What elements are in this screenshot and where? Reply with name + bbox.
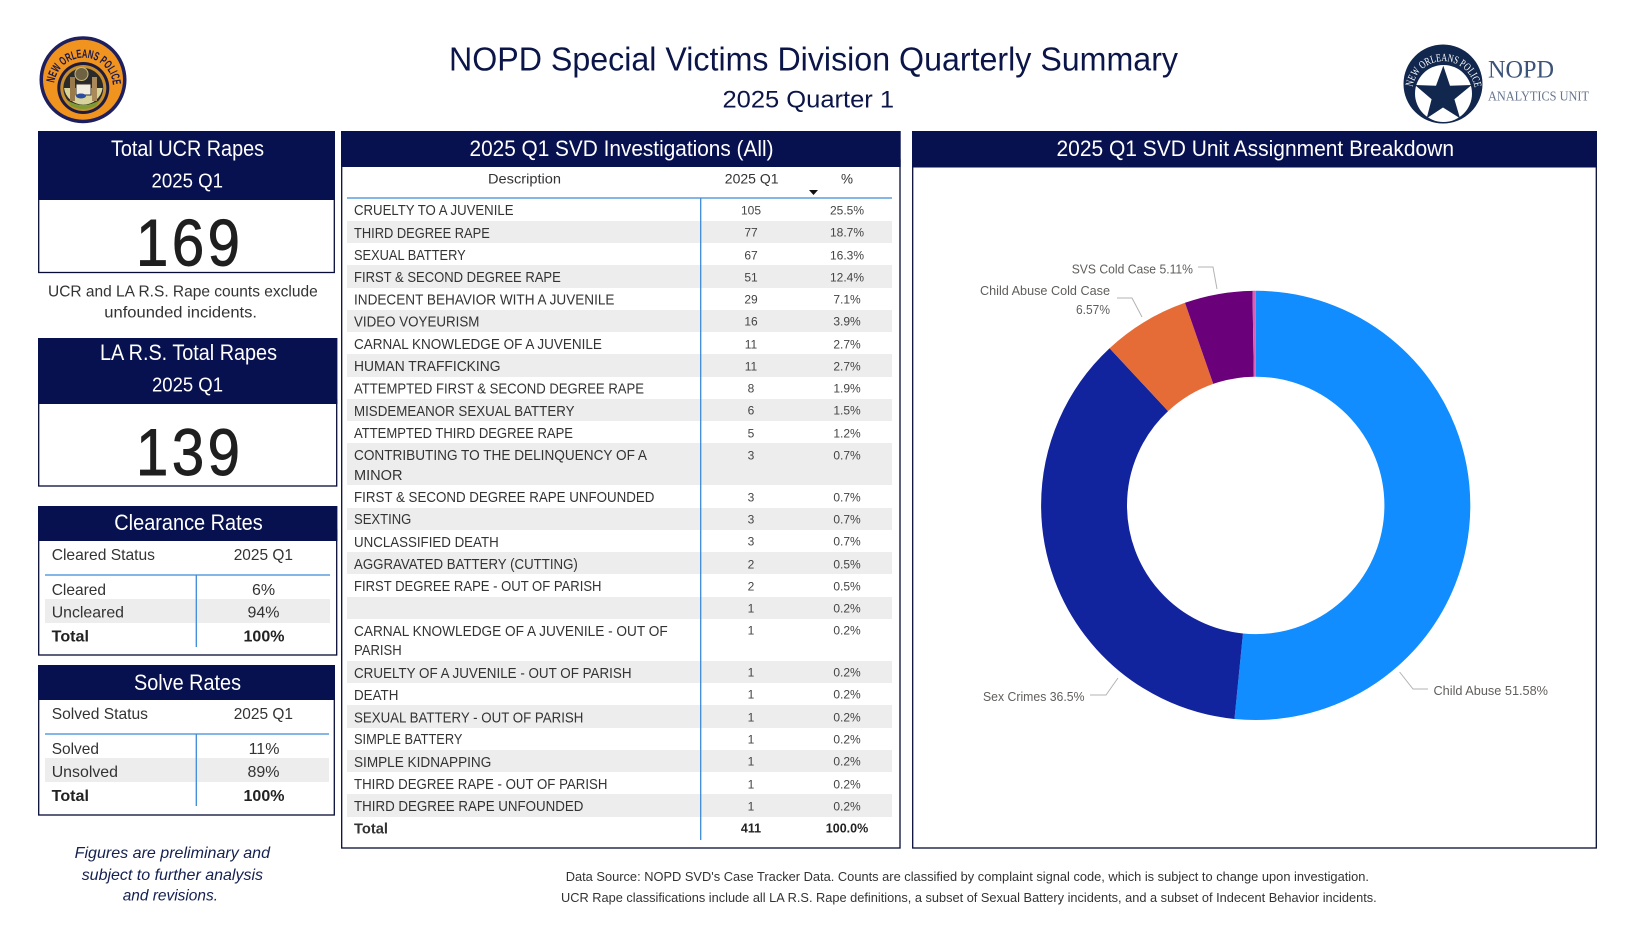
table descriptions: FIRST & SECOND DEGREE RAPE UNFOUNDED [354, 489, 655, 506]
table percentages: 0.7% [833, 448, 861, 462]
table counts: 6 [748, 403, 755, 417]
note: exclusion of unfounded incidents: unfounded incidents. [104, 304, 257, 322]
label: Sex Crimes [983, 678, 1118, 704]
panel: LA R.S. Total Rapes: LA R.S. Total Rapes [100, 340, 277, 365]
table descriptions: AGGRAVATED BATTERY (CUTTING) [354, 556, 578, 573]
table counts: 2 [748, 557, 755, 571]
panel: Clearance Rates: 100% [244, 629, 284, 646]
panel: Solve Rates: Solve Rates [134, 670, 241, 695]
table counts: 3 [748, 534, 755, 548]
panel: Clearance Rates: 6% [252, 582, 275, 599]
table descriptions: SIMPLE BATTERY [354, 731, 462, 748]
panel: Total UCR Rapes: 2025 Q1 [152, 170, 223, 192]
table percentages: 2.7% [833, 337, 861, 351]
heading: unit assignment [912, 131, 1597, 168]
table header: 2025 Q1 [725, 170, 779, 186]
panel: LA R.S. Total Rapes: 139 [136, 417, 243, 490]
panel: Clearance Rates: 94% [247, 605, 280, 622]
table descriptions: PARISH [354, 642, 402, 659]
panel: Solve Rates [38, 665, 335, 815]
note: figures are preliminary [75, 845, 271, 905]
table descriptions: HUMAN TRAFFICKING [354, 358, 500, 375]
table counts: 77 [744, 225, 758, 239]
table descriptions: THIRD DEGREE RAPE - OUT OF PARISH [354, 776, 607, 793]
panel: Clearance Rates: Clearance Rates [114, 510, 263, 535]
icon: NOPD Analytics Unit logo [1404, 44, 1589, 124]
panel: Total UCR Rapes: 169 [136, 207, 243, 281]
icon: New Orleans Police patch logo: NEW ORLEANS POLICE [46, 50, 122, 85]
panel: Solve Rates: Unsolved [52, 764, 118, 781]
table counts: 1 [748, 665, 755, 679]
table counts: 51 [744, 270, 758, 284]
icon: New Orleans Police patch logo [40, 36, 126, 124]
table counts: 3 [748, 490, 755, 504]
note: figures are preliminary: and revisions. [123, 888, 218, 905]
panel: Unit Assignment Breakdown: 2025 Q1 SVD Unit Assignment Breakdown [1056, 136, 1454, 161]
table counts: 1 [748, 687, 755, 701]
table counts: 67 [744, 248, 758, 262]
table descriptions: SEXTING [354, 511, 411, 528]
table percentages: 16.3% [830, 248, 864, 262]
panel: Clearance Rates: 2025 Q1 [234, 547, 293, 564]
note: figures are preliminary: Figures are preliminary and [75, 845, 271, 862]
table percentages [826, 203, 868, 835]
table counts: 11 [745, 359, 758, 373]
icon: NOPD Analytics Unit logo: ANALYTICS UNIT [1488, 90, 1589, 105]
table percentages: 18.7% [830, 225, 864, 239]
table percentages: 0.2% [833, 754, 861, 768]
table descriptions: CARNAL KNOWLEDGE OF A JUVENILE [354, 336, 602, 353]
table header: Description [488, 170, 561, 186]
table descriptions: CRUELTY TO A JUVENILE [354, 202, 514, 219]
panel: Solve Rates: Solved [52, 741, 99, 758]
table percentages: 2.7% [833, 359, 861, 373]
table descriptions [354, 202, 668, 838]
panel: Clearance Rates [38, 506, 337, 655]
table counts: 1 [748, 601, 755, 615]
table descriptions: VIDEO VOYEURISM [354, 314, 479, 331]
table descriptions: CONTRIBUTING TO THE DELINQUENCY OF A [354, 447, 647, 464]
table percentages: 0.5% [833, 557, 861, 571]
table percentages: 3.9% [833, 314, 861, 328]
table descriptions: SIMPLE KIDNAPPING [354, 754, 491, 771]
table descriptions: FIRST DEGREE RAPE - OUT OF PARISH [354, 578, 602, 595]
table descriptions: CARNAL KNOWLEDGE OF A JUVENILE - OUT OF [354, 623, 668, 640]
table counts: 411 [741, 821, 761, 835]
table percentages: 7.1% [833, 292, 861, 306]
table percentages: 100.0% [826, 821, 868, 835]
label: SVS Cold Case: SVS Cold Case 5.11% [1072, 262, 1193, 277]
panel: Total UCR Rapes: Total UCR Rapes [111, 136, 264, 161]
table counts: 105 [741, 203, 761, 217]
panel: Clearance Rates: Cleared Status [52, 547, 155, 564]
table counts: 3 [748, 512, 755, 526]
table descriptions: CRUELTY OF A JUVENILE - OUT OF PARISH [354, 665, 632, 682]
table descriptions: Total [354, 821, 388, 838]
heading: investigations [341, 131, 901, 167]
table percentages: 0.2% [833, 687, 861, 701]
table percentages: 1.2% [833, 426, 861, 440]
table percentages: 0.2% [833, 623, 861, 637]
note: exclusion of unfounded incidents [48, 284, 318, 322]
table percentages: 0.7% [833, 534, 861, 548]
table descriptions: FIRST & SECOND DEGREE RAPE [354, 269, 561, 286]
table descriptions: MISDEMEANOR SEXUAL BATTERY [354, 403, 574, 420]
label: Child Abuse Cold Case: 6.57% [1076, 302, 1110, 317]
table percentages: 0.2% [833, 777, 861, 791]
panel: LA R.S. Total Rapes [38, 338, 337, 490]
label: Child Abuse [1400, 672, 1548, 698]
label: Sex Crimes: Sex Crimes 36.5% [983, 689, 1085, 704]
note: exclusion of unfounded incidents: UCR and LA R.S. Rape counts exclude [48, 284, 318, 300]
table counts: 1 [748, 799, 755, 813]
table descriptions: SEXUAL BATTERY - OUT OF PARISH [354, 709, 583, 726]
subtitle: 2025 Quarter 1 [722, 87, 894, 114]
table descriptions: UNCLASSIFIED DEATH [354, 534, 499, 551]
icon: NOPD Analytics Unit logo: NOPD [1488, 56, 1554, 83]
table counts: 29 [744, 292, 758, 306]
table row shading [347, 221, 892, 817]
table header: % [841, 170, 853, 186]
table counts: 11 [745, 337, 758, 351]
table descriptions: THIRD DEGREE RAPE [354, 225, 490, 242]
footer: data source notes: Data Source: NOPD SVD's Case Tracker Data. Counts are classified by complaint signal code, which is subject to change upon investigation. [566, 869, 1369, 884]
table counts: 1 [748, 710, 755, 724]
donut chart [1084, 291, 1427, 677]
label: Child Abuse Cold Case: Child Abuse Cold Case [980, 283, 1110, 298]
table percentages: 0.2% [833, 665, 861, 679]
table descriptions: DEATH [354, 687, 398, 704]
table counts: 8 [748, 381, 755, 395]
panel: LA R.S. Total Rapes: 2025 Q1 [152, 374, 223, 396]
table percentages: 25.5% [830, 203, 864, 217]
panel: Solve Rates: 11% [249, 741, 279, 758]
table percentages: 0.7% [833, 490, 861, 504]
table descriptions: MINOR [354, 467, 403, 484]
panel: Solve Rates: Solved Status [52, 706, 148, 723]
table counts: 1 [748, 623, 755, 637]
panel: Solve Rates: Total [52, 788, 89, 805]
panel: Clearance Rates: Total [52, 629, 89, 646]
table percentages: 1.5% [833, 403, 861, 417]
panel: Unit Assignment Breakdown [912, 131, 1597, 848]
icon: NOPD Analytics Unit logo: NEW ORLEANS POLICE [1406, 54, 1482, 88]
table percentages: 0.2% [833, 710, 861, 724]
panel: Total UCR Rapes [38, 131, 335, 281]
panel: SVD Investigations table [341, 131, 901, 848]
note: figures are preliminary: subject to further analysis [82, 867, 263, 884]
table header [488, 170, 853, 195]
panel: Solve Rates: 89% [247, 764, 280, 781]
table counts: 2 [748, 579, 755, 593]
table descriptions: THIRD DEGREE RAPE UNFOUNDED [354, 798, 584, 815]
table counts [741, 203, 761, 835]
panel: Clearance Rates: Uncleared [52, 605, 124, 622]
label: Child Abuse Cold Case [980, 283, 1142, 317]
panel: Solve Rates: 100% [244, 788, 284, 805]
table percentages: 0.2% [833, 601, 861, 615]
label: SVS Cold Case [1072, 262, 1217, 289]
label: Child Abuse: Child Abuse 51.58% [1434, 683, 1548, 698]
table descriptions: INDECENT BEHAVIOR WITH A JUVENILE [354, 292, 614, 309]
table percentages: 12.4% [830, 270, 864, 284]
table percentages: 1.9% [833, 381, 861, 395]
table counts: 5 [748, 426, 755, 440]
table counts: 1 [748, 754, 755, 768]
panel: SVD Investigations table: 2025 Q1 SVD Investigations (All) [470, 136, 774, 161]
table counts: 1 [748, 732, 755, 746]
table descriptions: ATTEMPTED FIRST & SECOND DEGREE RAPE [354, 381, 644, 398]
table descriptions: SEXUAL BATTERY [354, 247, 466, 264]
title: NOPD Special Victims Division Quarterly Summary [449, 42, 1178, 79]
panel: Solve Rates: 2025 Q1 [234, 706, 293, 723]
table percentages: 0.2% [833, 799, 861, 813]
table counts: 3 [748, 448, 755, 462]
table counts: 1 [748, 777, 755, 791]
table descriptions: ATTEMPTED THIRD DEGREE RAPE [354, 425, 573, 442]
footer: data source notes: UCR Rape classifications include all LA R.S. Rape definitions, a subset of Sexual Battery incidents, and a subset of Indecent Behavior incidents. [561, 890, 1377, 905]
table percentages: 0.7% [833, 512, 861, 526]
table percentages: 0.5% [833, 579, 861, 593]
table counts: 16 [744, 314, 758, 328]
panel: Clearance Rates: Cleared [52, 582, 106, 599]
footer: data source notes [561, 869, 1377, 905]
table percentages: 0.2% [833, 732, 861, 746]
